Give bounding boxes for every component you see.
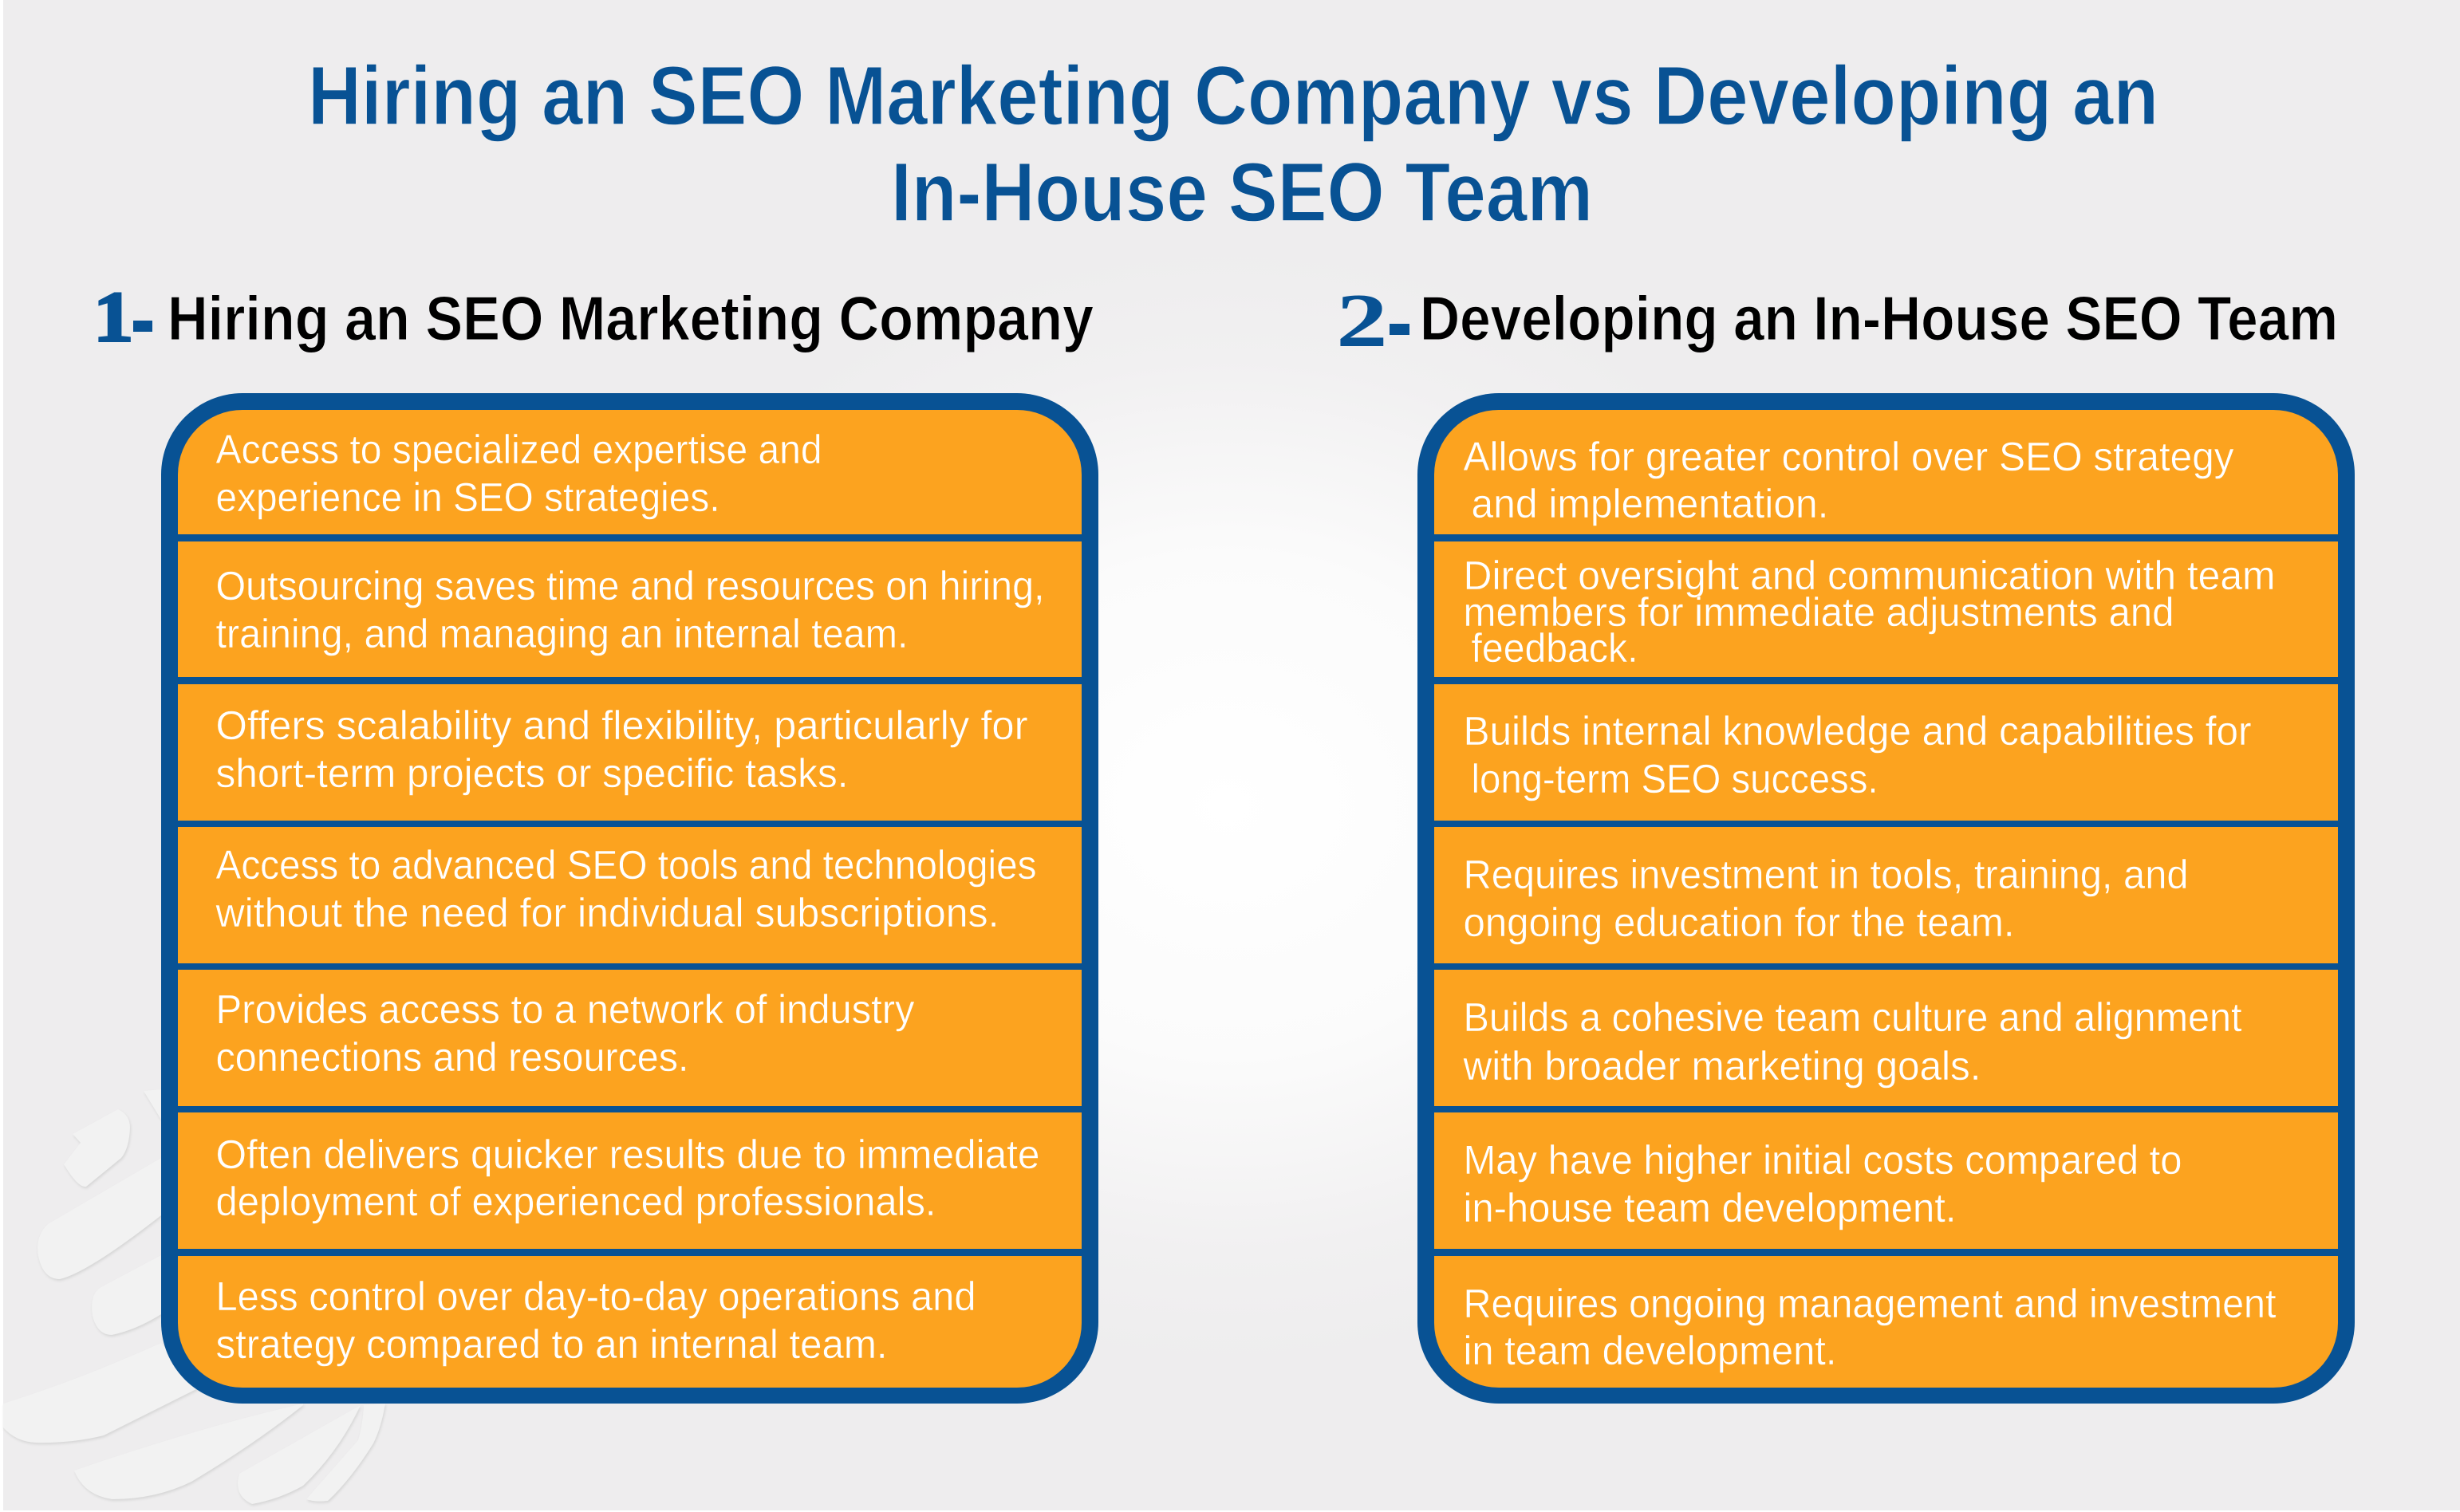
item: quicker results: deployment of experienced professionals.: [215, 1179, 936, 1224]
item: scalability: Offers scalability and flexibility, particularly for: [215, 703, 1028, 748]
item: internal knowledge: Builds internal knowledge and capabilities for: [1463, 708, 2252, 754]
panel: in-house team: [1417, 393, 2355, 1404]
item: saves time and resources: Outsourcing saves time and resources on hiring,: [215, 563, 1045, 608]
item: investment in tools: [1434, 827, 2338, 963]
number 1: [93, 277, 152, 356]
item: less control: strategy compared to an internal team.: [215, 1321, 887, 1367]
item: internal knowledge: long-term SEO success.: [1471, 756, 1878, 801]
column 1 heading: [93, 277, 1094, 356]
item: less control: [178, 1256, 1082, 1388]
item: investment in tools: ongoing education for the team.: [1463, 900, 2015, 945]
item: industry network: Provides access to a network of industry: [215, 986, 915, 1032]
item: team culture: Builds a cohesive team culture and alignment: [1463, 994, 2241, 1040]
column 2 heading: [1336, 278, 2338, 363]
item: quicker results: [178, 1112, 1082, 1249]
item: higher costs: May have higher initial costs compared to: [1463, 1137, 2182, 1183]
item: direct oversight: [1434, 541, 2338, 677]
item: ongoing management: [1434, 1256, 2338, 1388]
heading text: Developing an In-House SEO Team: [1420, 283, 2338, 353]
decorative hand watermark: [3, 1089, 385, 1504]
item: direct oversight: Direct oversight and communication with team: [1463, 553, 2275, 598]
item: greater control: Allows for greater control over SEO strategy: [1463, 434, 2234, 479]
item: saves time and resources: [178, 541, 1082, 677]
item: specialized expertise: Access to specialized expertise and: [215, 427, 822, 472]
panel frame: [161, 393, 1098, 1404]
item: specialized expertise: experience in SEO strategies.: [215, 474, 719, 520]
panel frame: [1417, 393, 2355, 1404]
item: greater control: [1434, 410, 2338, 534]
title: [308, 49, 2158, 239]
item: scalability: [178, 684, 1082, 821]
item: greater control: and implementation.: [1471, 481, 1828, 526]
item: industry network: connections and resources.: [215, 1034, 689, 1080]
item: direct oversight: feedback.: [1471, 625, 1638, 671]
item: industry network: [178, 970, 1082, 1106]
item: internal knowledge: [1434, 684, 2338, 821]
heading text: Hiring an SEO Marketing Company: [168, 283, 1094, 353]
item: advanced tools: without the need for individual subscriptions.: [215, 890, 999, 935]
item: less control: Less control over day-to-day operations and: [215, 1274, 976, 1319]
item: advanced tools: [178, 827, 1082, 963]
item: ongoing management: Requires ongoing management and investment: [1463, 1281, 2277, 1326]
panel: hiring an SEO company: [161, 393, 1098, 1404]
item: quicker results: Often delivers quicker results due to immediate: [215, 1132, 1040, 1177]
item: specialized expertise: [178, 410, 1082, 534]
item: team culture: with broader marketing goals.: [1463, 1043, 1981, 1089]
title: Hiring an SEO Marketing Company vs Developing an: [308, 49, 2158, 143]
item: advanced tools: Access to advanced SEO tools and technologies: [215, 842, 1037, 888]
item: direct oversight: members for immediate adjustments and: [1463, 589, 2174, 635]
number 2: 2: [1336, 278, 1388, 363]
item: scalability: short-term projects or specific tasks.: [215, 750, 849, 796]
item: ongoing management: in team development.: [1463, 1328, 1836, 1373]
title: In-House SEO Team: [891, 146, 1593, 239]
item: team culture: [1434, 970, 2338, 1106]
item: investment in tools: Requires investment in tools, training, and: [1463, 852, 2189, 897]
item: higher costs: [1434, 1112, 2338, 1249]
item: higher costs: in-house team development.: [1463, 1185, 1956, 1230]
item: saves time and resources: training, and managing an internal team.: [215, 611, 908, 656]
number 1: 1: [93, 277, 133, 356]
